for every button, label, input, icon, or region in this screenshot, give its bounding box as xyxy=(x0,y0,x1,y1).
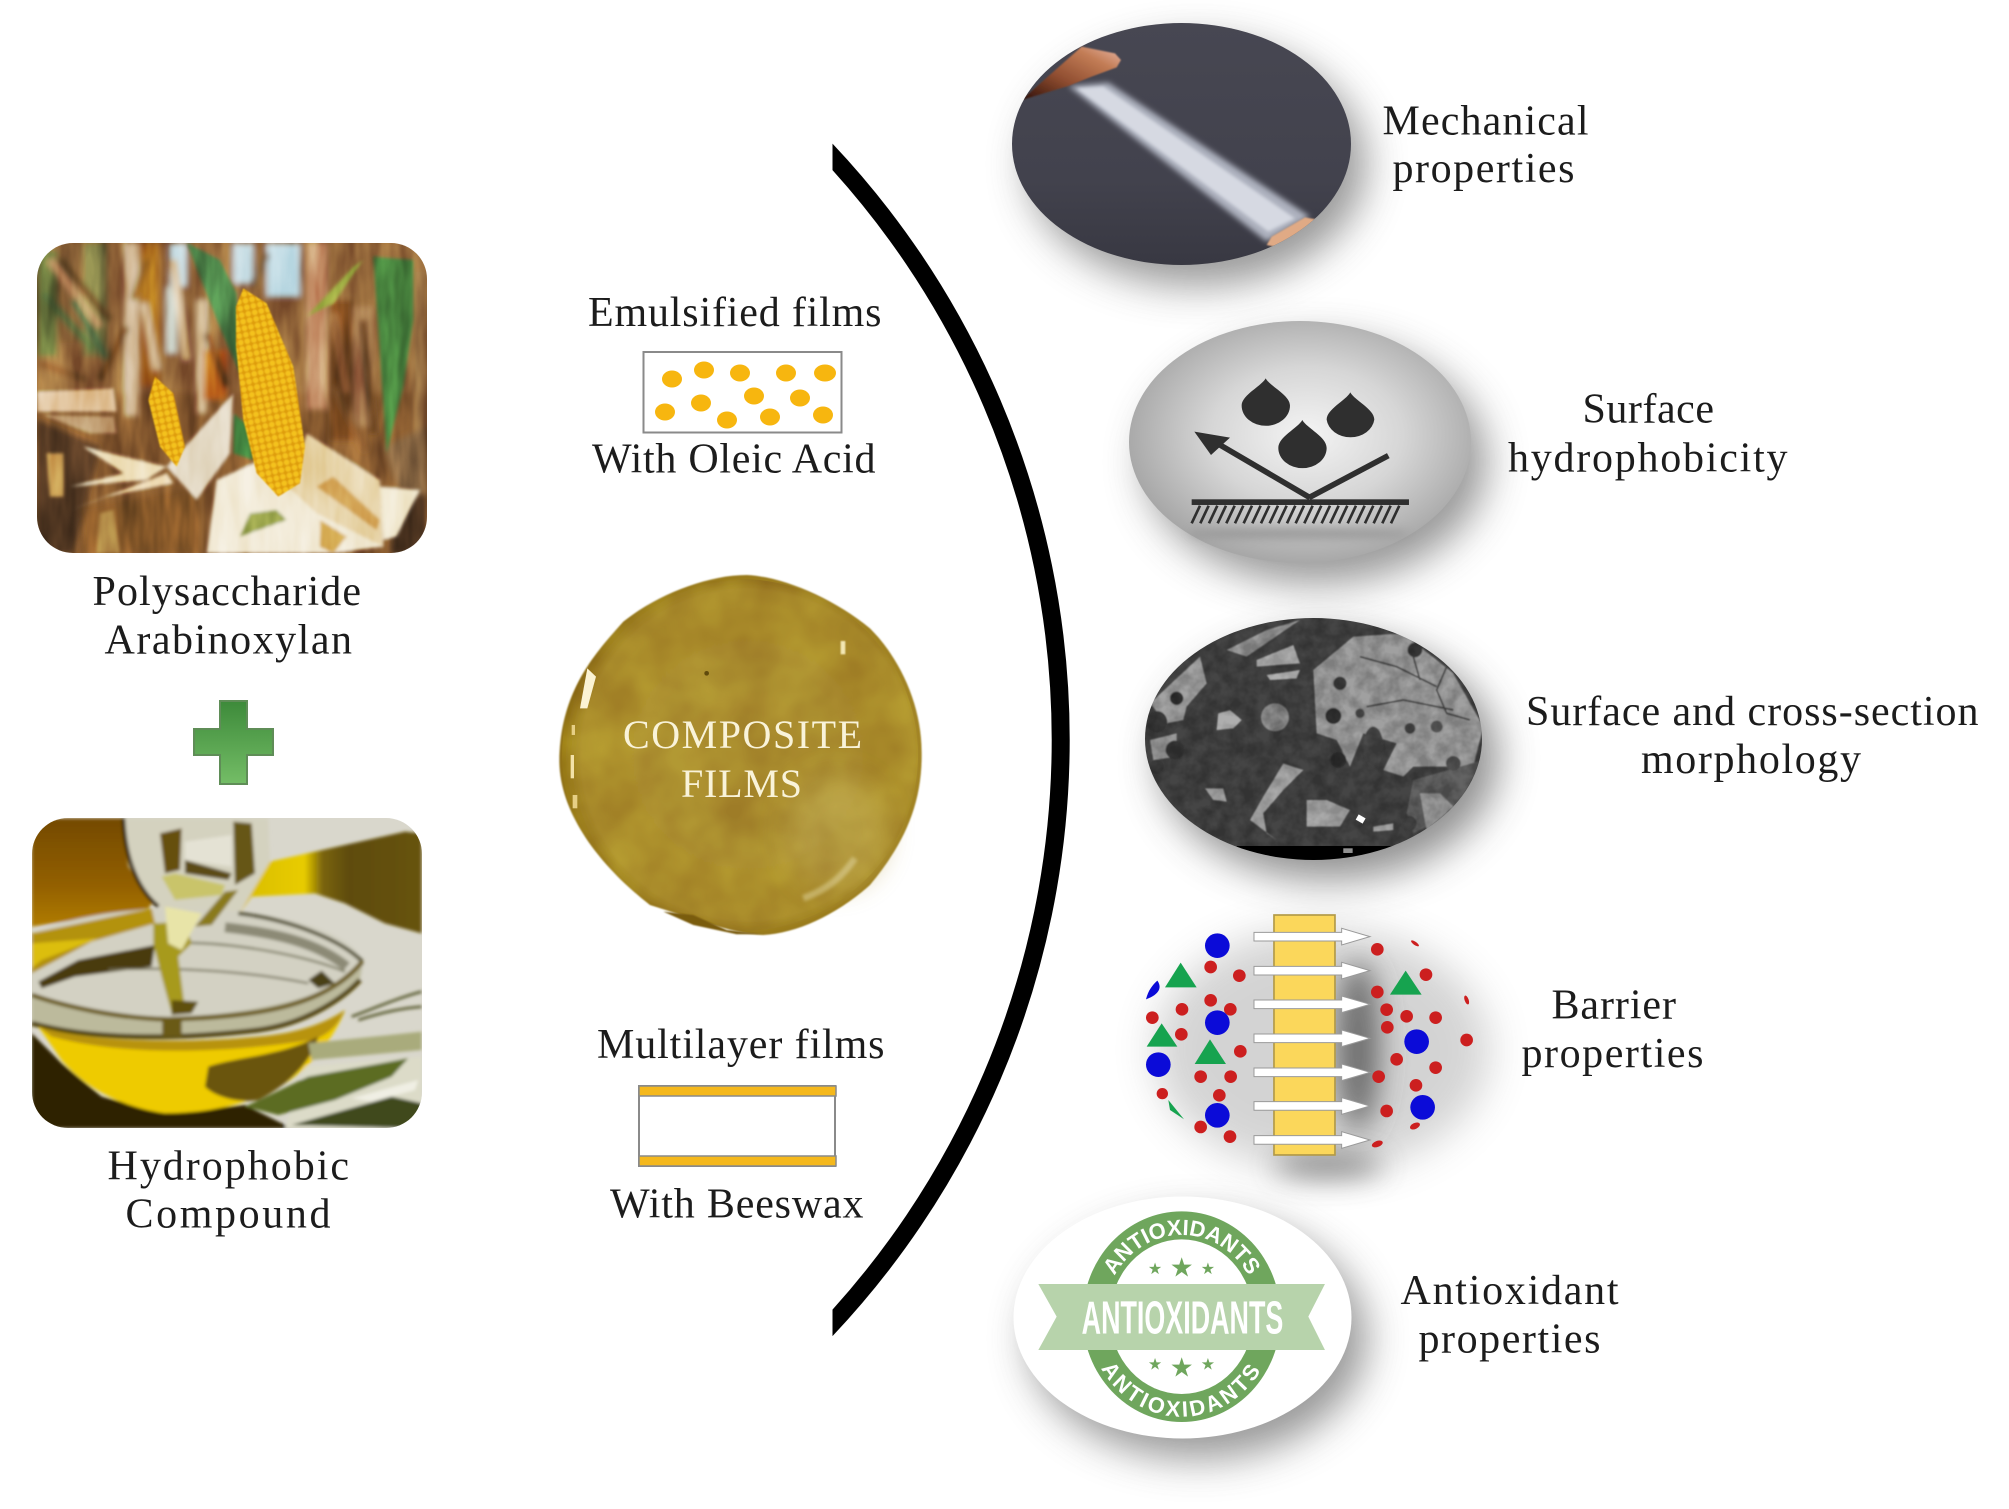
icon: antioxidants stamp: ★ xyxy=(1148,1259,1162,1278)
label: Mechanical properties: Mechanical xyxy=(1382,98,1588,144)
label: Barrier properties: Barrier xyxy=(1552,982,1676,1028)
label: Surface and cross-section morphology: Surface and cross-section xyxy=(1526,689,1978,735)
label: composite films xyxy=(623,712,862,806)
panel: oil photo xyxy=(0,818,422,1128)
label: Surface and cross-section morphology: morphology xyxy=(1641,737,1861,783)
label: Antioxidant properties xyxy=(1400,1268,1619,1362)
label: With Beeswax: With Beeswax xyxy=(610,1182,864,1228)
icon: antioxidants stamp: ANTIOXIDANTS xyxy=(1105,1220,1260,1276)
heading: Hydrophobic Compound xyxy=(108,1144,349,1238)
label: Mechanical properties: properties xyxy=(1392,146,1574,192)
icon: antioxidants stamp: ★ xyxy=(1201,1354,1215,1373)
icon: green plus xyxy=(194,701,273,784)
icon: antioxidants stamp: ★ xyxy=(1170,1253,1194,1284)
icon: antioxidants stamp xyxy=(1038,1211,1325,1422)
icon: permeation arrows xyxy=(1254,928,1370,1148)
label: Surface and cross-section morphology xyxy=(1526,689,1978,783)
label: composite films: FILMS xyxy=(681,761,802,806)
heading: Multilayer films: Multilayer films xyxy=(597,1022,884,1068)
label: Antioxidant properties: properties xyxy=(1418,1316,1600,1362)
panel: antioxidant properties xyxy=(1004,1192,1392,1484)
icon: contact angle diagram xyxy=(1192,378,1409,523)
heading: Emulsified films: Emulsified films xyxy=(588,290,882,336)
label: Barrier properties xyxy=(1522,982,1704,1077)
detail: film highlights xyxy=(571,641,845,934)
icon: antioxidants stamp: ★ xyxy=(1170,1353,1194,1384)
icon: antioxidants stamp: ANTIOXIDANTS xyxy=(1082,1291,1283,1343)
heading: Hydrophobic Compound: Compound xyxy=(126,1192,330,1238)
icon: emulsified film box xyxy=(644,352,842,432)
label: With Oleic Acid: With Oleic Acid xyxy=(592,436,876,482)
heading: Polysaccharide Arabinoxylan xyxy=(92,569,361,664)
heading: Hydrophobic Compound: Hydrophobic xyxy=(108,1144,349,1190)
label: Antioxidant properties: Antioxidant xyxy=(1400,1268,1619,1314)
panel: surface hydrophobicity xyxy=(1129,321,1487,584)
label: Surface hydrophobicity xyxy=(1508,386,1788,482)
panel: barrier properties xyxy=(1146,915,1490,1177)
label: composite films: COMPOSITE xyxy=(623,712,862,757)
panel: corn photo xyxy=(37,243,427,553)
heading: Polysaccharide Arabinoxylan: Polysaccharide xyxy=(92,569,361,615)
label: Barrier properties: properties xyxy=(1522,1031,1704,1077)
label: Surface hydrophobicity: hydrophobicity xyxy=(1508,436,1788,482)
heading: Polysaccharide Arabinoxylan: Arabinoxylan xyxy=(104,618,352,664)
icon: antioxidants stamp: ANTIOXIDANTS xyxy=(1101,1364,1259,1417)
texture: film mottling xyxy=(562,580,918,891)
icon: multilayer film box xyxy=(639,1086,836,1166)
arrow: black arc bracket xyxy=(816,139,1061,1341)
panel: mechanical properties xyxy=(1012,23,1366,286)
panel: surface and cross-section morphology xyxy=(1145,618,1498,880)
icon: antioxidants stamp: ★ xyxy=(1148,1354,1162,1373)
label: Surface hydrophobicity: Surface xyxy=(1582,386,1714,432)
icon: antioxidants stamp: ★ xyxy=(1201,1259,1215,1278)
panel: composite film disc xyxy=(559,575,922,935)
label: Mechanical properties xyxy=(1382,98,1588,192)
chart: gas molecules xyxy=(1146,933,1473,1149)
